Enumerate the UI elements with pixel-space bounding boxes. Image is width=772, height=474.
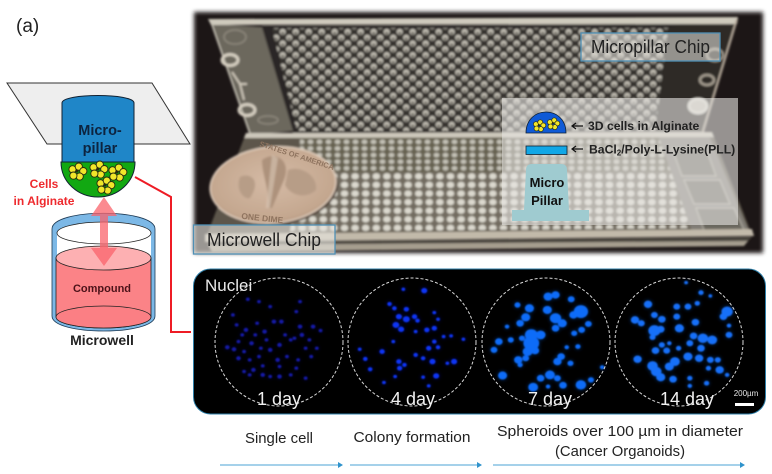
label: microwell chip bbox=[194, 225, 335, 254]
day 1 cell dots bbox=[225, 298, 322, 380]
micropillar body: Micro- bbox=[78, 123, 122, 139]
label: nuclei: Nuclei bbox=[205, 276, 252, 295]
photo background bbox=[194, 12, 763, 253]
day labels: 1 day bbox=[257, 389, 301, 409]
day 14 spheroids bbox=[631, 281, 733, 388]
dime coin bbox=[207, 142, 341, 230]
coin engraved lettering: STATES OF AMERICA bbox=[258, 139, 336, 172]
label: cells in alginate: in Alginate bbox=[14, 194, 75, 208]
translucent overlay panel bbox=[502, 98, 738, 225]
icon: 3D cells in alginate dome bbox=[526, 112, 566, 133]
panel label (a): (a) bbox=[16, 16, 39, 37]
label: compound: Compound bbox=[73, 283, 131, 295]
stage label: single cell: Single cell bbox=[245, 431, 313, 447]
micropillar body bbox=[61, 96, 135, 197]
microwell beaker bbox=[52, 213, 155, 331]
icon: micro pillar bbox=[512, 164, 589, 221]
day 4 colonies bbox=[358, 288, 465, 388]
photo: micropillar and microwell chips bbox=[194, 12, 763, 254]
arrow: red connector to nuclei panel bbox=[135, 177, 191, 332]
arrow: spheroid stage bbox=[493, 462, 745, 468]
stage label: spheroids: (Cancer Organoids) bbox=[555, 444, 685, 460]
dashed well outlines bbox=[215, 278, 743, 406]
coin engraved lettering bbox=[241, 139, 336, 225]
micropillar chip plane bbox=[7, 83, 190, 144]
day labels bbox=[257, 389, 714, 409]
label: BaCl2/Poly-L-Lysine(PLL): BaCl bbox=[589, 142, 617, 156]
label: micropillar chip bbox=[581, 33, 720, 61]
label: BaCl2/Poly-L-Lysine(PLL): 2 bbox=[617, 148, 622, 158]
arrow to 3D cells label bbox=[572, 123, 583, 129]
day labels: 7 day bbox=[528, 389, 572, 409]
label: microwell chip: Microwell Chip bbox=[207, 230, 321, 250]
label: cells in alginate: Cells bbox=[30, 177, 59, 191]
icon: micro pillar: Pillar bbox=[531, 193, 563, 208]
diagram: micropillar and microwell bbox=[7, 83, 191, 348]
label: BaCl2/Poly-L-Lysine(PLL): /Poly-L-Lysine(PLL) bbox=[621, 142, 735, 156]
stage label: colony formation: Colony formation bbox=[354, 430, 470, 446]
stage label: spheroids bbox=[497, 424, 743, 460]
day labels: 14 day bbox=[660, 389, 714, 409]
label: micropillar chip: Micropillar Chip bbox=[591, 37, 710, 57]
arrow: colony stage bbox=[350, 462, 482, 468]
coin engraved lettering: ONE DIME bbox=[241, 211, 284, 225]
label: microwell: Microwell bbox=[70, 332, 134, 348]
label: 3D cells in alginate: 3D cells in Alginate bbox=[588, 119, 700, 133]
scale bar bbox=[734, 389, 759, 406]
icon: BaCl2 layer bbox=[526, 146, 567, 154]
microwell chip plate bbox=[205, 132, 754, 252]
micropillar chip plate bbox=[208, 17, 738, 135]
scale bar: 200µm bbox=[734, 389, 759, 398]
day labels: 4 day bbox=[391, 389, 435, 409]
label: cells in alginate bbox=[14, 177, 75, 208]
arrow: double-headed exchange bbox=[91, 197, 117, 266]
arrow to BaCl2 label bbox=[572, 146, 583, 152]
panel: nuclei fluorescence images bbox=[194, 269, 766, 414]
stage label: spheroids: Spheroids over 100 µm in diameter bbox=[497, 424, 743, 440]
icon: yellow cell clusters bbox=[69, 161, 127, 194]
panel background bbox=[194, 269, 766, 414]
micropillar body: pillar bbox=[83, 141, 118, 157]
arrow: single cell stage bbox=[220, 462, 343, 468]
icon: micro pillar: Micro bbox=[530, 175, 564, 190]
day 7 spheroids bbox=[491, 291, 604, 392]
